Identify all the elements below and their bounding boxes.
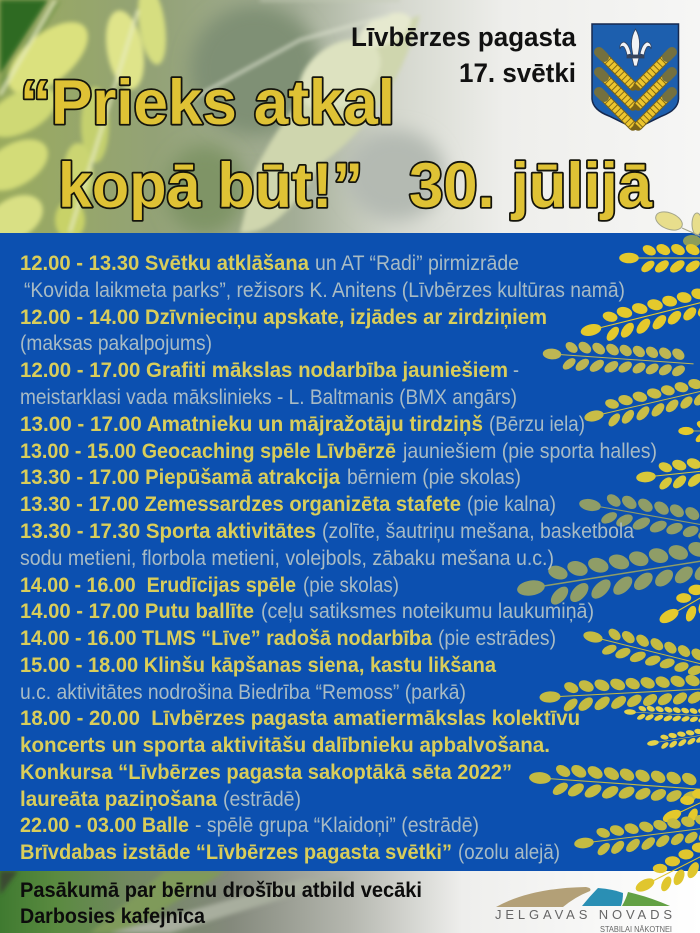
line 2: “Kovida laikmeta parks”, režisors K. Anitens (Līvbērzes kultūras namā): [24, 279, 625, 302]
line 8: 13.00 - 15.00 Geocaching spēle Līvbērzē: [20, 440, 396, 463]
line 21: (estrādē): [223, 788, 301, 811]
line 1: un AT “Radi” pirmizrāde: [315, 252, 519, 275]
line 22: - spēlē grupa “Klaidoņi” (estrādē): [195, 814, 479, 837]
footer notes: Pasākumā par bērnu drošību atbild vecāki: [20, 878, 422, 902]
line 15: (pie estrādes): [438, 627, 556, 650]
fleur-de-lis: [620, 29, 651, 66]
line 4: (maksas pakalpojums): [20, 332, 212, 355]
line 14: 14.00 - 17.00 Putu ballīte: [20, 600, 254, 623]
sprig 2: [619, 242, 700, 275]
sprig 8: [576, 485, 700, 553]
line 3: 12.00 - 14.00 Dzīvnieciņu apskate, izjādes ar zirdziņiem: [20, 306, 547, 329]
schedule text: [20, 252, 657, 864]
sprig 12: [539, 671, 700, 716]
sprig 10: [651, 520, 700, 637]
line 9: [20, 466, 521, 489]
logo wordmark: JELGAVAS NOVADS: [495, 907, 672, 922]
sprig 7: [635, 445, 700, 495]
sprig 4: [542, 337, 695, 381]
line 10: 13.30 - 17.00 Zemessardzes organizēta stafete: [20, 493, 461, 516]
line 7: 13.00 - 17.00 Amatnieku un mājražotāju tirdziņš: [20, 413, 483, 436]
line 23: Brīvdabas izstāde “Līvbērzes pagasta svētki”: [20, 841, 452, 864]
sprig 13: [624, 703, 700, 725]
line 20: Konkursa “Līvbērzes pagasta sakoptākā sēta 2022”: [20, 761, 512, 784]
line 6: meistarklasi vada mākslinieks - L. Baltmanis (BMX angārs): [20, 386, 517, 409]
line 5: 12.00 - 17.00 Grafiti mākslas nodarbība jauniešiem: [20, 359, 508, 382]
line 1: [20, 252, 519, 275]
top pale grains overlapping the header: [653, 208, 700, 247]
line 11: [20, 520, 634, 543]
line 15: 14.00 - 16.00 TLMS “Līve” radošā nodarbība: [20, 627, 432, 650]
line 18: 18.00 - 20.00 Līvbērzes pagasta amatiermākslas kolektīvu: [20, 707, 580, 730]
sprig 6: [678, 418, 700, 444]
line 11: (zolīte, šautriņu mešana, basketbola: [322, 520, 634, 543]
footer notes: Darbosies kafejnīca: [20, 904, 206, 928]
heading: event name: Līvbērzes pagasta: [351, 22, 576, 52]
line 13: (pie skolas): [303, 574, 399, 597]
line 19: koncerts un sporta aktivitāšu dalībnieku apbalvošana.: [20, 734, 550, 757]
line 12: sodu metieni, florbola metieni, volejbols, zābaku mešana u.c.): [20, 547, 554, 570]
sprig 11: [579, 619, 700, 690]
line 13: 14.00 - 16.00 Erudīcijas spēle: [20, 574, 296, 597]
title line 1: “Prieks atkal: [20, 68, 395, 138]
line 22: 22.00 - 03.00 Balle: [20, 814, 189, 837]
title line 2: kopā būt!”: [58, 151, 363, 221]
line 23: (ozolu alejā): [458, 841, 560, 864]
decorative wheat sprigs: [514, 208, 700, 905]
heading: event name: [351, 22, 576, 88]
footer notes: [20, 878, 422, 928]
blue schedule panel: [0, 233, 700, 871]
heading: event name: 17. svētki: [459, 58, 576, 88]
sprig 17: [572, 809, 700, 861]
line 22: [20, 814, 479, 837]
line 9: bērniem (pie skolas): [347, 466, 521, 489]
sprig 16: [656, 738, 700, 836]
line 10: (pie kalna): [467, 493, 556, 516]
line 5: -: [513, 359, 519, 382]
wheat chevrons: [599, 52, 672, 126]
sprig 14: [646, 721, 700, 753]
line 16: 15.00 - 18.00 Klinšu kāpšanas siena, kastu likšana: [20, 654, 496, 677]
line 8: jauniešiem (pie sporta halles): [402, 440, 657, 463]
sprig 15: [528, 759, 700, 809]
line 17: u.c. aktivitātes nodrošina Biedrība “Remoss” (parkā): [20, 681, 466, 704]
sprig 18: [628, 800, 700, 905]
date: 30. jūlijā: [409, 151, 653, 221]
photo background: footer strip: [0, 871, 700, 933]
title: [20, 68, 653, 221]
line 1: 12.00 - 13.30 Svētku atklāšana: [20, 252, 309, 275]
logo hills: [496, 887, 670, 907]
line 14: [20, 600, 594, 623]
line 21: laureāta paziņošana: [20, 788, 217, 811]
line 7: (Bērzu iela): [489, 413, 585, 436]
icon: coat of arms: [592, 24, 678, 129]
line 9: 13.30 - 17.00 Piepūšamā atrakcija: [20, 466, 340, 489]
line 14: (ceļu satiksmes noteikumu laukumiņā): [261, 600, 594, 623]
photo background: wheat header: [0, 0, 700, 250]
sprig 9: [514, 532, 700, 614]
line 8: [20, 440, 657, 463]
line 11: 13.30 - 17.30 Sporta aktivitātes: [20, 520, 316, 543]
sprig 5: [581, 366, 700, 435]
logo: Jelgavas novads: [495, 887, 672, 933]
sprig 3: [577, 274, 700, 350]
